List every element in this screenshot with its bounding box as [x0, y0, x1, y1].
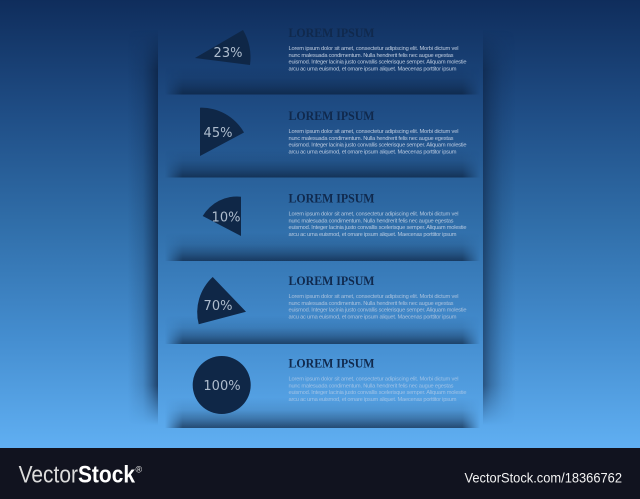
body text 4: nunc malesuada condimentum. Nulla hendrerit felis nec augue egestas — [288, 301, 454, 307]
body text 5: arcu ac urna euismod, et ornare ipsum aliquet. Maecenas porttitor ipsum — [288, 397, 457, 403]
heading 5: LOREM IPSUM — [288, 356, 375, 370]
body text 5 — [288, 376, 466, 403]
body text 5: euismod. Integer lacinia justo convallis scelerisque semper. Aliquam molestie — [288, 390, 466, 396]
pie: 23% — [195, 30, 250, 65]
panel 3: 10% — [158, 192, 483, 261]
right side shadow — [483, 42, 510, 422]
heading 2: LOREM IPSUM — [288, 109, 375, 123]
panel 2: 45% — [158, 108, 483, 178]
pie: 45% — [200, 108, 244, 156]
body text 4: euismod. Integer lacinia justo convallis scelerisque semper. Aliquam molestie — [288, 308, 466, 314]
heading 4: LOREM IPSUM — [288, 274, 375, 288]
value: 45%: 45% — [204, 126, 232, 141]
body text 3: euismod. Integer lacinia justo convallis scelerisque semper. Aliquam molestie — [288, 225, 466, 231]
value: 10%: 10% — [212, 210, 240, 226]
pie: 10% — [203, 197, 241, 236]
body text 4: Lorem ipsum dolor sit amet, consectetur adipiscing elit. Morbi dictum vel — [288, 294, 458, 300]
body text 5: Lorem ipsum dolor sit amet, consectetur adipiscing elit. Morbi dictum vel — [288, 376, 458, 382]
value: 100%: 100% — [203, 379, 241, 394]
body text 2: nunc malesuada condimentum. Nulla hendrerit felis nec augue egestas — [288, 136, 454, 142]
body text 1: nunc malesuada condimentum. Nulla hendrerit felis nec augue egestas — [288, 53, 454, 59]
body text 3 — [288, 212, 466, 238]
body text 3: nunc malesuada condimentum. Nulla hendrerit felis nec augue egestas — [288, 218, 454, 224]
image id: VectorStock.com/18366762 — [464, 470, 622, 485]
panel 1: 23% — [158, 26, 483, 94]
body text 1: euismod. Integer lacinia justo convallis scelerisque semper. Aliquam molestie — [288, 60, 466, 66]
heading 1: LOREM IPSUM — [288, 26, 375, 40]
panel 4: 70% — [158, 274, 483, 344]
body text 2: euismod. Integer lacinia justo convallis scelerisque semper. Aliquam molestie — [288, 143, 466, 149]
registered mark: ® — [136, 464, 142, 474]
body text 3: arcu ac urna euismod, et ornare ipsum aliquet. Maecenas porttitor ipsum — [288, 232, 457, 238]
logo: VectorStock: VectorStock — [19, 461, 136, 488]
body text 3: Lorem ipsum dolor sit amet, consectetur adipiscing elit. Morbi dictum vel — [288, 212, 458, 218]
panel 5: 100% — [158, 356, 483, 428]
body text 4 — [288, 294, 466, 320]
body text 5: nunc malesuada condimentum. Nulla hendrerit felis nec augue egestas — [288, 383, 454, 389]
pie: 100% — [193, 356, 251, 414]
body text 2: Lorem ipsum dolor sit amet, consectetur adipiscing elit. Morbi dictum vel — [288, 129, 458, 135]
body text 4: arcu ac urna euismod, et ornare ipsum aliquet. Maecenas porttitor ipsum — [288, 314, 457, 320]
pie: 70% — [197, 277, 246, 324]
value: 23%: 23% — [214, 46, 242, 61]
body text 1: arcu ac urna euismod, et ornare ipsum aliquet. Maecenas porttitor ipsum — [288, 66, 457, 72]
body text 2: arcu ac urna euismod, et ornare ipsum aliquet. Maecenas porttitor ipsum — [288, 149, 457, 155]
body text 2 — [288, 129, 466, 155]
body text 1 — [288, 46, 466, 72]
body text 1: Lorem ipsum dolor sit amet, consectetur adipiscing elit. Morbi dictum vel — [288, 46, 458, 52]
heading 3: LOREM IPSUM — [288, 192, 375, 206]
footer bar — [0, 448, 640, 499]
left side shadow — [132, 40, 158, 422]
value: 70%: 70% — [204, 299, 232, 314]
